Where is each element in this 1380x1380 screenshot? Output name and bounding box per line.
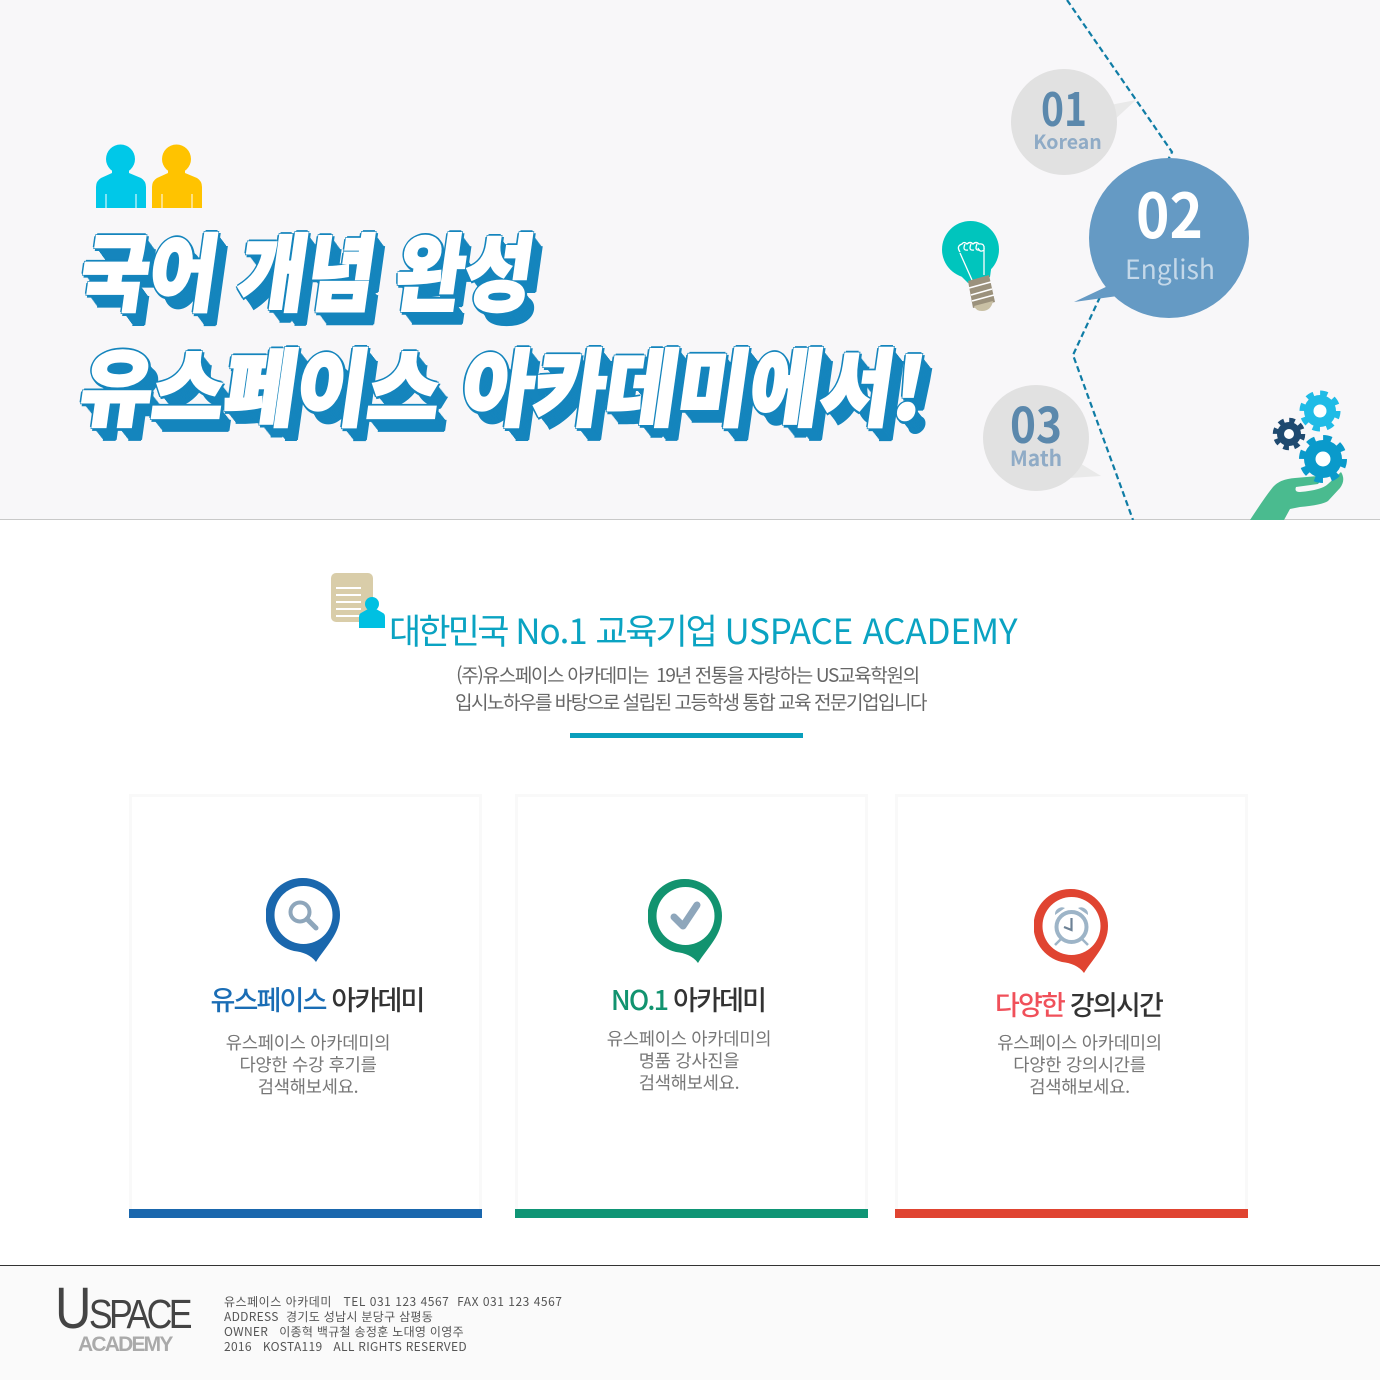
card 2 description: 명품 강사진을: [639, 1047, 739, 1073]
card 3 description: 검색해보세요.: [1029, 1073, 1130, 1099]
icon: hand with gears: [1250, 394, 1343, 520]
panel: card 2: [515, 879, 868, 1218]
card 1 description: 다양한 수강 후기를: [239, 1051, 377, 1077]
bubble 03: 03: [1010, 387, 1062, 458]
section intro text: [455, 661, 927, 715]
bubble 01: Korean: [1033, 126, 1102, 155]
footer contact text: OWNER 이종혁 백규철 송정훈 노대영 이영주: [224, 1323, 464, 1340]
gear mid: [1303, 439, 1343, 479]
subject bubbles: [942, 0, 1347, 520]
card 3 title: 다양한 강의시간: [995, 984, 1162, 1023]
bubble 01: [1011, 69, 1136, 175]
icon: document with person: [331, 573, 385, 628]
gear dark: [1276, 420, 1302, 448]
icon: check pin: [648, 879, 722, 963]
bubble 01: 01: [1041, 74, 1087, 140]
panel: card 1: [129, 878, 482, 1218]
icon: two people: [96, 144, 202, 208]
hero background: [0, 0, 1380, 520]
logo: USPACE: [55, 1276, 189, 1341]
logo: ACADEMY: [78, 1333, 172, 1356]
icon: clock pin: [1034, 889, 1108, 973]
card 2 title: NO.1 아카데미: [611, 979, 765, 1018]
section intro text: (주)유스페이스 아카데미는 19년 전통을 자랑하는 US교육학원의: [456, 661, 919, 688]
gear light: [1303, 394, 1337, 428]
footer contact text: ADDRESS 경기도 성남시 분당구 삼평동: [224, 1308, 433, 1325]
bubble 03: Math: [1010, 443, 1062, 473]
section heading: 대한민국 No.1 교육기업 USPACE ACADEMY: [389, 604, 1017, 655]
footer background: [0, 1265, 1380, 1380]
card 1 description: [226, 1029, 390, 1099]
card 3 description: 유스페이스 아카데미의: [997, 1029, 1162, 1055]
card 2 description: 유스페이스 아카데미의: [607, 1025, 771, 1051]
footer contact text: 2016 KOSTA119 ALL RIGHTS RESERVED: [224, 1338, 467, 1355]
card 3 description: [997, 1029, 1162, 1099]
footer contact text: 유스페이스 아카데미 TEL 031 123 4567 FAX 031 123 4567: [224, 1293, 562, 1310]
icon: light bulb: [942, 221, 999, 311]
bubble 02: 02: [1136, 166, 1203, 256]
title line 2: 유스페이스 아카데미에서!: [74, 323, 934, 444]
heading rule: [570, 733, 803, 738]
icon: search pin: [266, 878, 340, 962]
title line 1: 국어 개념 완성: [74, 208, 543, 329]
panel: card 3: [895, 889, 1248, 1218]
bubble 02: [1074, 158, 1249, 318]
card 1 title: 유스페이스 아카데미: [210, 979, 424, 1018]
card 1 description: 검색해보세요.: [258, 1073, 358, 1099]
card 3 description: 다양한 강의시간를: [1013, 1051, 1146, 1077]
card 2 description: 검색해보세요.: [639, 1069, 739, 1095]
footer contact text: [224, 1293, 562, 1355]
card 1 description: 유스페이스 아카데미의: [226, 1029, 390, 1055]
bubble 03: [983, 385, 1101, 491]
card 2 description: [607, 1025, 771, 1095]
section intro text: 입시노하우를 바탕으로 설립된 고등학생 통합 교육 전문기업입니다: [455, 688, 926, 715]
bubble 02: English: [1125, 248, 1215, 287]
dashed route: [1067, 0, 1172, 520]
